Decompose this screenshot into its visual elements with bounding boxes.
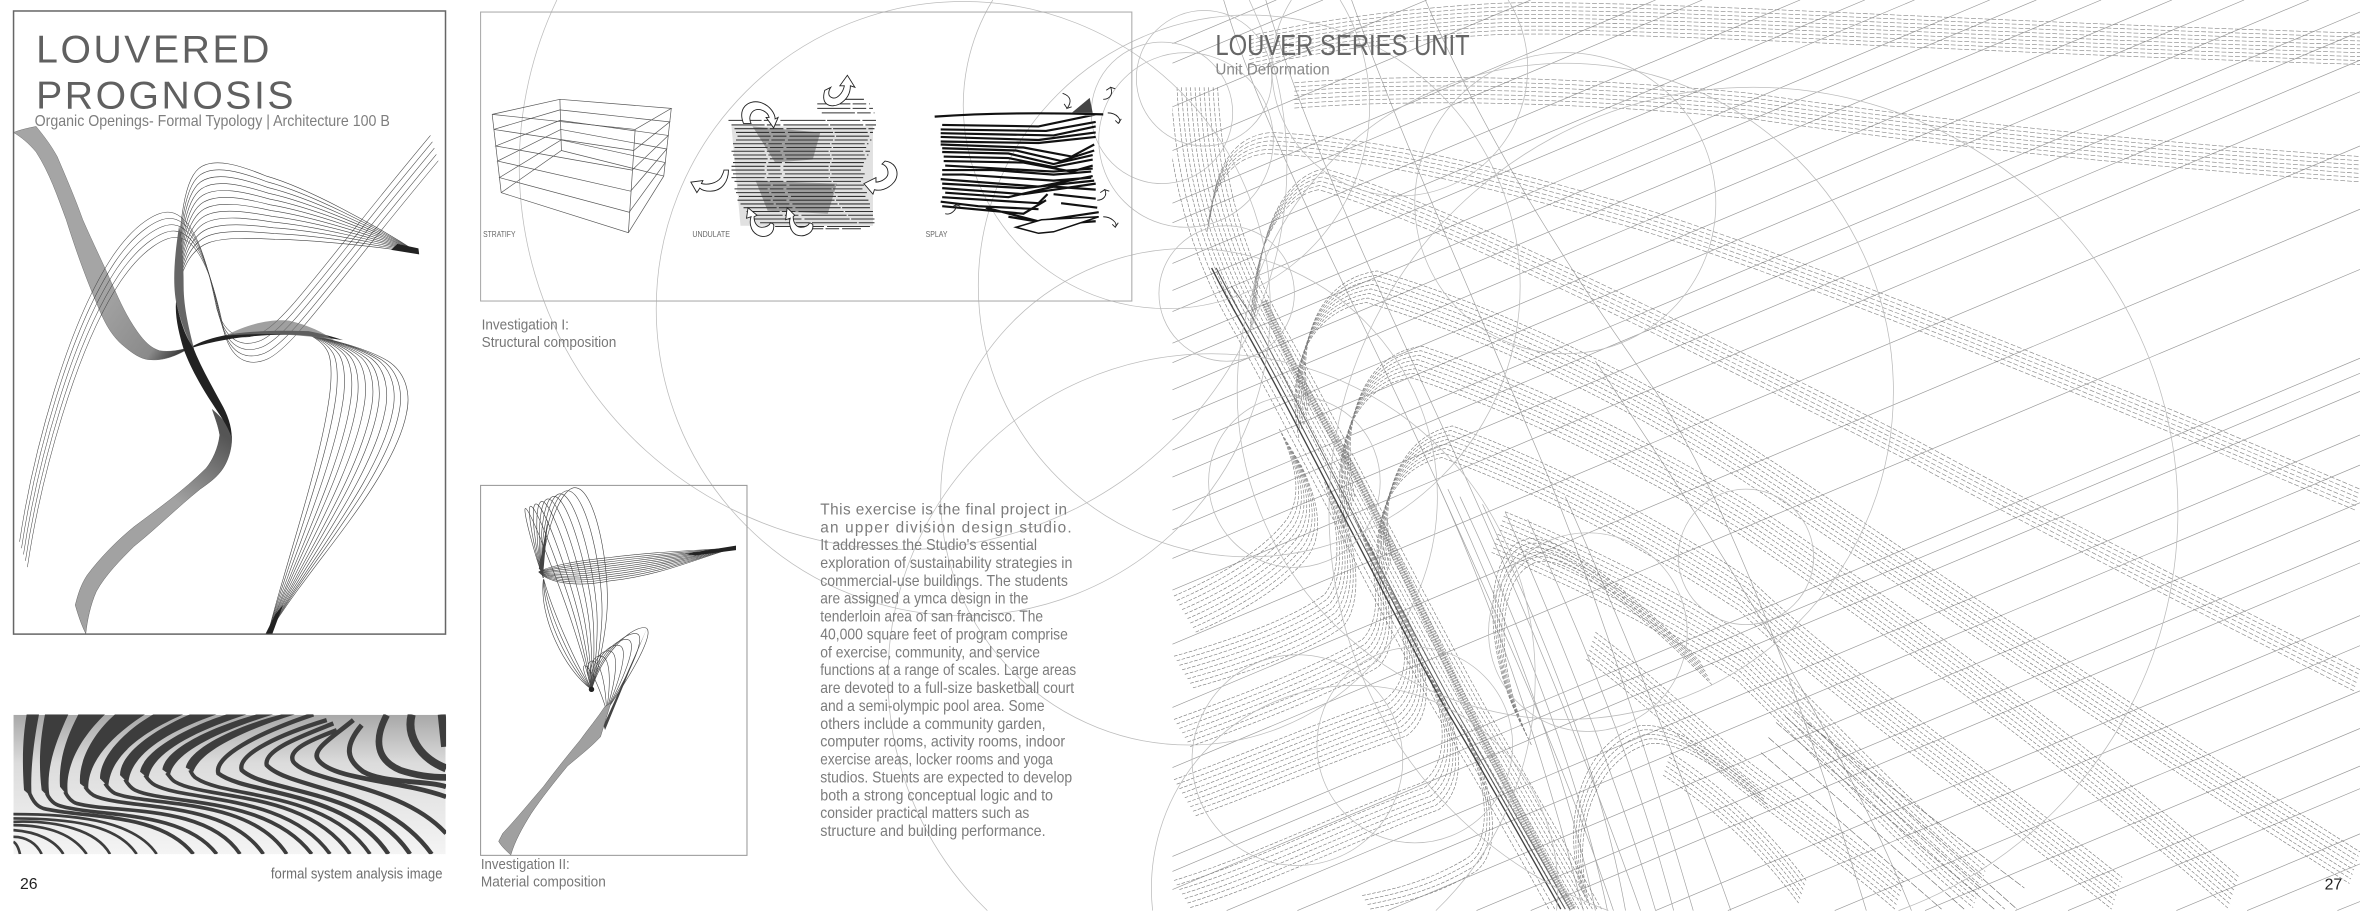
band: lower-left six bbox=[1362, 722, 1492, 909]
title: LOUVERED bbox=[36, 28, 269, 71]
dark knot bands and tips bbox=[174, 226, 419, 634]
small loop family bbox=[552, 601, 687, 737]
panel: investigation II bbox=[469, 464, 747, 855]
title bbox=[36, 28, 293, 117]
right page: dashed louver bands bbox=[1165, 3, 2360, 909]
panel: cover frame with louver figure bbox=[14, 11, 448, 652]
striped mass: undulate bbox=[728, 99, 876, 229]
body text block: It addresses the Studio's essential bbox=[820, 537, 1037, 554]
wire box: stratify bbox=[492, 99, 671, 233]
body text block: functions at a range of scales. Large areas bbox=[820, 662, 1076, 679]
right page: diagonal louver lines bbox=[1172, 0, 2360, 911]
body text block: tenderloin area of san francisco. The bbox=[820, 609, 1043, 626]
body text block: others include a community garden, bbox=[820, 716, 1046, 733]
band: dashes along central strand bbox=[1165, 87, 1601, 909]
right page: thin rib lines bbox=[1224, 0, 1911, 911]
body text block: studios. Stuents are expected to develop bbox=[820, 769, 1072, 786]
construction circles bbox=[519, 0, 2178, 911]
body text block: structure and building performance. bbox=[820, 823, 1046, 840]
body text block: are devoted to a full-size basketball court bbox=[820, 680, 1075, 697]
band: tenth bbox=[1663, 753, 1806, 903]
band: ninth bbox=[1586, 632, 1904, 909]
body text block: This exercise is the final project in bbox=[820, 501, 1067, 518]
page number right: 27 bbox=[2325, 876, 2342, 893]
band: lower-left three bbox=[1174, 519, 1392, 747]
band: seventh bbox=[1377, 426, 2122, 909]
stacked lines: splay bbox=[935, 98, 1103, 233]
band: lower-left two bbox=[1174, 482, 1356, 688]
arrows: undulate bbox=[691, 75, 897, 237]
cover frame bbox=[14, 11, 446, 634]
frame bbox=[481, 485, 747, 855]
label: splay: SPLAY bbox=[926, 230, 948, 239]
body text block: consider practical matters such as bbox=[820, 805, 1030, 822]
body text block: 40,000 square feet of program comprise bbox=[820, 627, 1068, 644]
right page: dark central strands bbox=[1212, 268, 1573, 909]
caption: investigation II: Material composition bbox=[481, 874, 606, 890]
arrows: splay bbox=[945, 87, 1121, 227]
band: lower-left one bbox=[1174, 429, 1318, 632]
body text block: exercise areas, locker rooms and yoga bbox=[820, 751, 1053, 768]
fan: upper arch to right tip bbox=[161, 130, 435, 318]
lower-left lines converging bbox=[503, 562, 632, 707]
band: lower-left four bbox=[1174, 579, 1426, 816]
body text block: of exercise, community, and service bbox=[820, 644, 1040, 661]
subheading: unit deformation: Unit Deformation bbox=[1215, 62, 1330, 79]
label: undulate: UNDULATE bbox=[692, 230, 730, 239]
lens family to right tip bbox=[534, 524, 739, 608]
tips and lower ribbon bbox=[499, 519, 736, 855]
label: stratify: STRATIFY bbox=[483, 230, 516, 239]
body text block: both a strong conceptual logic and to bbox=[820, 787, 1053, 804]
frame bbox=[481, 12, 1132, 301]
ribbon: upper-left band into knot bbox=[14, 126, 193, 360]
body text block bbox=[820, 501, 1076, 840]
strand: S-curve five lines bbox=[20, 135, 438, 567]
band: third bbox=[1207, 132, 2360, 510]
band: lower-left five bbox=[1174, 662, 1458, 908]
body text block: an upper division design studio. bbox=[820, 519, 1072, 536]
band: arc right of strand one bbox=[1493, 539, 1712, 745]
caption: investigation I: Structural composition bbox=[482, 335, 616, 351]
band: arc right of strand two bbox=[1574, 725, 1768, 906]
caption: investigation I bbox=[482, 318, 616, 351]
body text block: are assigned a ymca design in the bbox=[820, 591, 1028, 608]
right page: dark convergence lines bbox=[1761, 710, 2024, 909]
body text block: computer rooms, activity rooms, indoor bbox=[820, 734, 1065, 751]
band: fifth bbox=[1295, 271, 2360, 884]
body text block: exploration of sustainability strategies in bbox=[820, 555, 1072, 572]
band: fourth bbox=[1251, 169, 2360, 691]
band: second bbox=[1294, 77, 2360, 182]
fan: right loop to bottom tip bbox=[228, 316, 448, 652]
panel: formal system photo bbox=[13, 714, 446, 854]
band: sixth bbox=[1340, 346, 2240, 909]
caption: investigation I: Investigation I: bbox=[482, 318, 569, 334]
band: eighth bbox=[1492, 512, 1987, 908]
title: PROGNOSIS bbox=[36, 74, 293, 117]
body text block: commercial-use buildings. The students bbox=[820, 573, 1068, 590]
subtitle: Organic Openings- Formal Typology | Architecture 100 B bbox=[35, 113, 390, 130]
heading: louver series unit: LOUVER SERIES UNIT bbox=[1215, 29, 1470, 61]
caption: investigation II bbox=[481, 857, 606, 890]
panel: investigation I bbox=[481, 12, 1132, 301]
caption: photo: formal system analysis image bbox=[271, 866, 443, 882]
ribbon: lower band bbox=[75, 409, 232, 634]
body text block: and a semi-olympic pool area. Some bbox=[820, 698, 1045, 715]
page number left: 26 bbox=[20, 876, 38, 893]
big loop family bbox=[469, 464, 681, 713]
caption: investigation II: Investigation II: bbox=[481, 857, 570, 873]
band: top bbox=[1249, 3, 2360, 67]
